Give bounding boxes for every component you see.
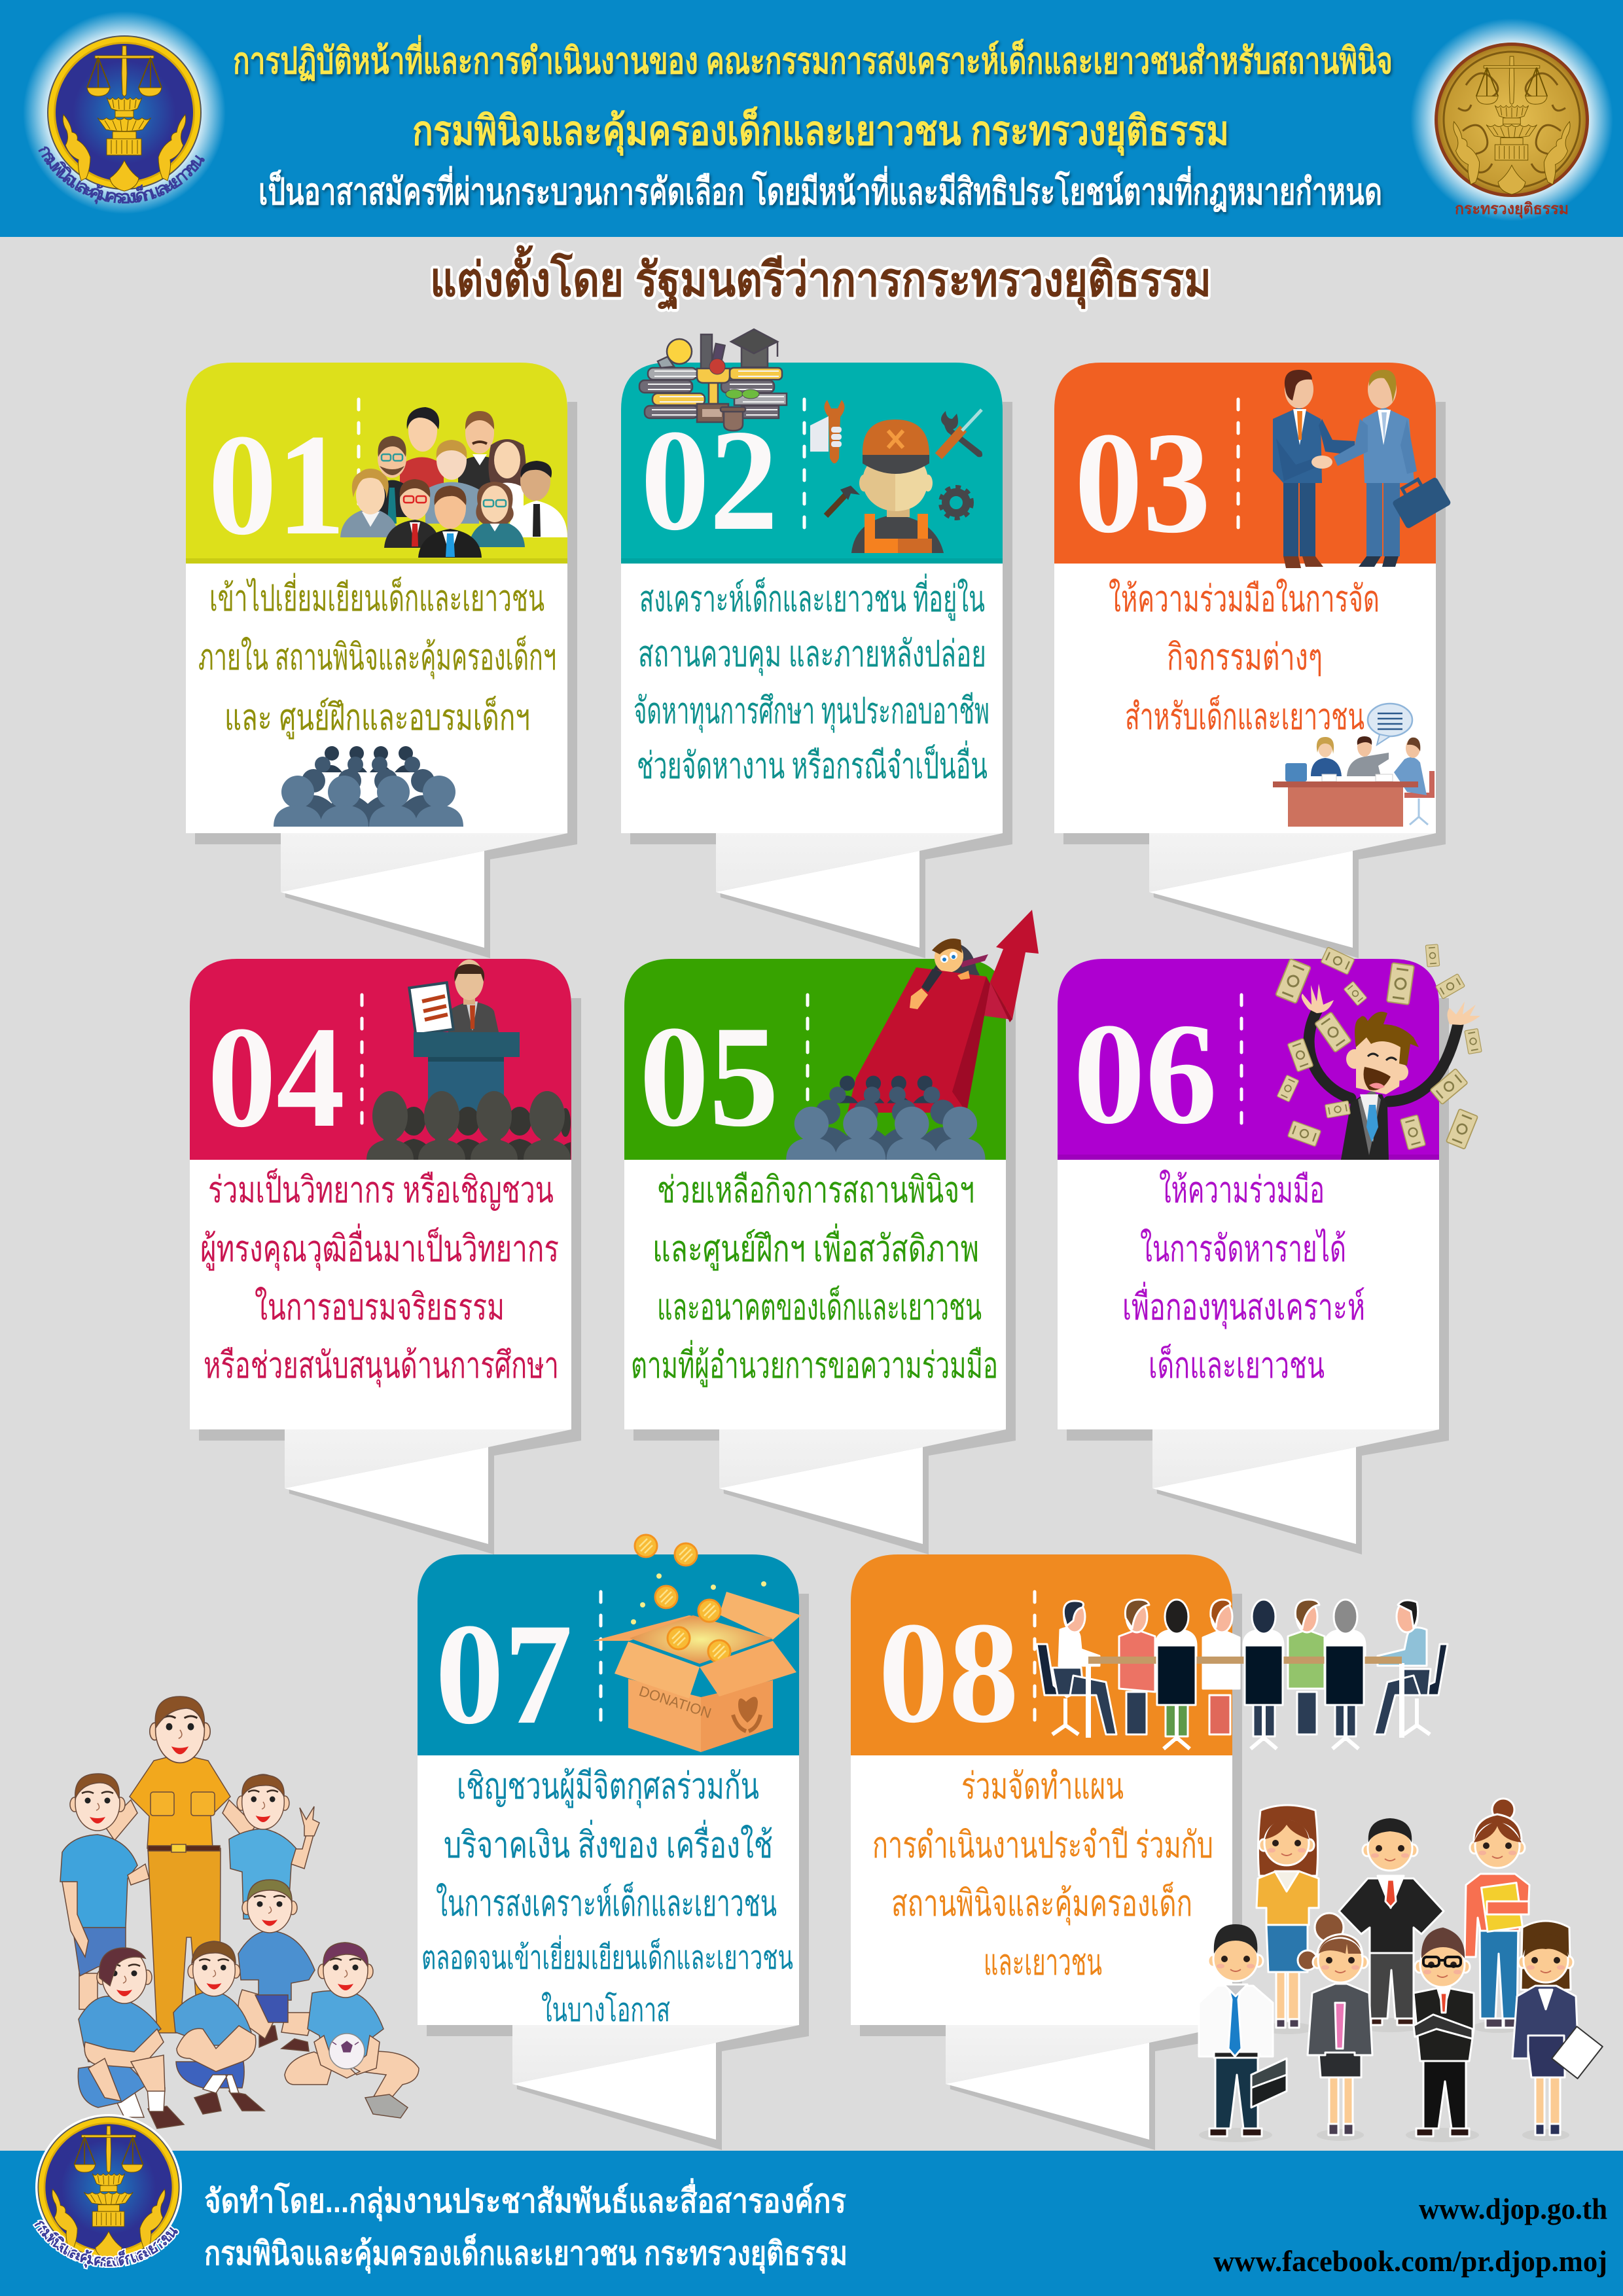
illustration: handshake — [1273, 370, 1452, 568]
illustration: group of people — [340, 407, 567, 558]
logo: footer emblem — [33, 2114, 182, 2270]
illustration: rising arrow and businessman — [847, 910, 1039, 1113]
body text 06: ในการจัดหารายได้ — [1140, 1228, 1346, 1269]
number 02: 02 — [641, 400, 778, 561]
panel: card 02 — [621, 329, 1012, 958]
number 06: 06 — [1073, 994, 1217, 1155]
body text 02 — [633, 573, 990, 786]
icon: audience — [786, 1076, 986, 1160]
illustration: dark audience — [366, 1091, 571, 1160]
body text 02: สงเคราะห์เด็กและเยาวชน ที่อยู่ใน — [639, 573, 985, 621]
body text 07: ในการสงเคราะห์เด็กและเยาวชน — [436, 1881, 777, 1924]
illustration: donation box and coins: DONATION — [637, 1683, 713, 1721]
man with glasses — [1414, 1928, 1474, 2136]
illustration: worker and tools — [810, 400, 982, 553]
body text 08: สถานพินิจและคุ้มครองเด็ก — [891, 1881, 1192, 1926]
body text 06 — [1122, 1169, 1365, 1386]
boy standing left — [60, 1774, 149, 2009]
icon: audience — [274, 746, 463, 827]
panel: card 01 — [186, 363, 577, 958]
body text 02: สถานควบคุม และภายหลังปล่อย — [638, 633, 986, 676]
boy seated front left — [78, 1948, 184, 2128]
boy seated back — [238, 1880, 315, 2051]
man with briefcase — [1199, 1924, 1287, 2136]
illustration: adult team standing — [1199, 1799, 1603, 2142]
boy seated centre — [173, 1941, 264, 2114]
body text 06: เด็กและเยาวชน — [1149, 1343, 1325, 1386]
illustration: donation box and coins — [593, 1535, 801, 1752]
body text 08: และเยาวชน — [984, 1941, 1102, 1982]
number 07: 07 — [435, 1594, 573, 1755]
body text 01 — [198, 573, 556, 740]
body text 03: สำหรับเด็กและเยาวชน — [1125, 694, 1364, 737]
body text 07 — [421, 1765, 793, 2028]
woman in yellow — [1257, 1805, 1319, 2028]
footer links — [1213, 2192, 1607, 2278]
header banner — [0, 0, 1623, 237]
number 04: 04 — [207, 997, 345, 1158]
boy standing right — [229, 1774, 319, 1919]
logo: department emblem: กรมพินิจและคุ้มครองเด็กและเยาวชน — [38, 147, 205, 204]
body text 03: กิจกรรมต่างๆ — [1167, 636, 1323, 677]
panel: card 06 — [1058, 944, 1482, 1554]
body text 06: ให้ความร่วมมือ — [1159, 1169, 1325, 1210]
man in dark suit — [1339, 1818, 1444, 2025]
panel: card 08 — [851, 1554, 1448, 2150]
illustration: happy man throwing money — [1275, 944, 1482, 1160]
illustration: officer with children — [60, 1696, 419, 2128]
panel: card 07 — [418, 1535, 809, 2150]
footer credit text — [204, 2178, 847, 2274]
body text 02: จัดหาทุนการศึกษา ทุนประกอบอาชีพ — [633, 690, 990, 733]
illustration: team meeting — [1037, 1600, 1448, 1749]
footer banner — [0, 2114, 1623, 2296]
body text 05: ตามที่ผู้อำนวยการขอความร่วมมือ — [631, 1340, 998, 1388]
body text 08: ร่วมจัดทำแผน — [961, 1765, 1124, 1806]
body text 01: ภายใน สถานพินิจและคุ้มครองเด็กฯ — [198, 635, 556, 679]
body text 02: ช่วยจัดหางาน หรือกรณีจำเป็นอื่น — [637, 740, 988, 786]
icon: books and education — [639, 329, 787, 431]
body text 01: และ ศูนย์ฝึกและอบรมเด็กฯ — [224, 695, 530, 740]
woman in grey blazer — [1298, 1913, 1372, 2135]
number 03: 03 — [1075, 403, 1211, 564]
body text 08: การดำเนินงานประจำปี ร่วมกับ — [872, 1824, 1213, 1865]
footer links: www.djop.go.th — [1419, 2192, 1607, 2225]
body text 03 — [1109, 578, 1380, 737]
body text 04: ในการอบรมจริยธรรม — [255, 1286, 505, 1327]
body text 07: บริจาคเงิน สิ่งของ เครื่องใช้ — [444, 1820, 773, 1865]
woman with folder — [1465, 1799, 1529, 2028]
woman in navy suit — [1512, 1921, 1603, 2135]
title: แต่งตั้งโดย รัฐมนตรีว่าการกระทรวงยุติธรรม — [430, 245, 1211, 310]
officer — [105, 1696, 255, 2033]
logo: ministry of justice seal — [1410, 18, 1613, 221]
number 01: 01 — [208, 404, 346, 565]
logo: footer emblem: กรมพินิจและคุ้มครองเด็กและเยาวชน — [33, 2219, 179, 2270]
body text 07: เชิญชวนผู้มีจิตกุศลร่วมกัน — [457, 1765, 759, 1808]
number 05: 05 — [639, 996, 779, 1157]
header line 2: กรมพินิจและคุ้มครองเด็กและเยาวชน กระทรวงยุติธรรม — [412, 106, 1229, 156]
illustration: meeting table — [1273, 704, 1432, 827]
body text 06: เพื่อกองทุนสงเคราะห์ — [1122, 1282, 1365, 1329]
body text 05: และอนาคตของเด็กและเยาวชน — [657, 1285, 982, 1327]
panel: card 03 — [1054, 363, 1452, 958]
panel: card 04 — [190, 959, 581, 1554]
panel: card 05 — [624, 910, 1039, 1554]
body text 08 — [872, 1765, 1213, 1982]
body text 05: และศูนย์ฝึกฯ เพื่อสวัสดิภาพ — [652, 1223, 979, 1271]
body text 07: ในบางโอกาส — [541, 1992, 670, 2028]
body text 05: ช่วยเหลือกิจการสถานพินิจฯ — [657, 1169, 974, 1210]
body text 04: ผู้ทรงคุณวุฒิอื่นมาเป็นวิทยากร — [200, 1223, 559, 1271]
body text 01: เข้าไปเยี่ยมเยียนเด็กและเยาวชน — [209, 573, 544, 619]
footer credit text: จัดทำโดย...กลุ่มงานประชาสัมพันธ์และสื่อสารองค์กร — [204, 2178, 846, 2221]
footer credit text: กรมพินิจและคุ้มครองเด็กและเยาวชน กระทรวงยุติธรรม — [204, 2233, 847, 2274]
footer links: www.facebook.com/pr.djop.moj — [1213, 2244, 1607, 2278]
body text 04: หรือช่วยสนับสนุนด้านการศึกษา — [204, 1344, 559, 1388]
illustration: speaker at podium — [409, 960, 520, 1113]
number 08: 08 — [878, 1592, 1019, 1753]
body text 05 — [631, 1169, 998, 1388]
body text 03: ให้ความร่วมมือในการจัด — [1109, 578, 1380, 619]
logo: department emblem — [24, 12, 225, 213]
body text 07: ตลอดจนเข้าเยี่ยมเยียนเด็กและเยาวชน — [421, 1935, 793, 1976]
logo: ministry of justice seal: กระทรวงยุติธรรม — [1455, 200, 1569, 219]
boy seated right — [285, 1943, 419, 2118]
body text 04: ร่วมเป็นวิทยากร หรือเชิญชวน — [208, 1168, 554, 1211]
body text 04 — [200, 1168, 559, 1388]
